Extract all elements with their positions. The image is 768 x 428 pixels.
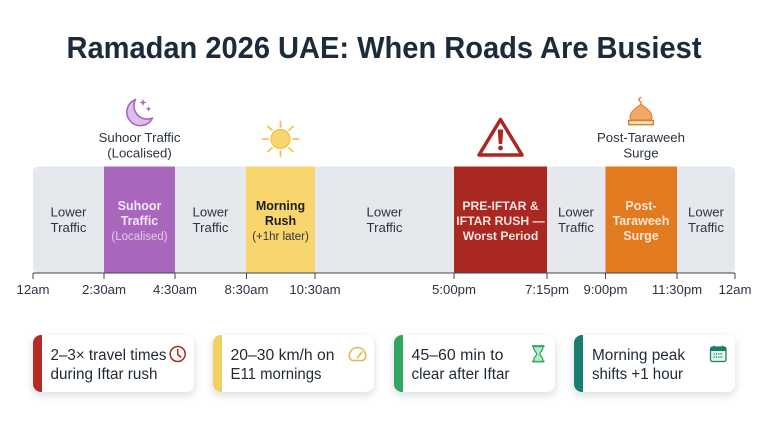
segment: morning rush: Rush [265, 214, 296, 228]
label: post-taraweeh surge: Surge [623, 146, 659, 160]
time axis: 9:00pm [584, 282, 628, 297]
icon: speedometer [349, 348, 366, 360]
segment: post-taraweeh surge: Surge [623, 229, 659, 243]
time axis: 4:30am [153, 282, 197, 297]
lower traffic labels: Lower [367, 204, 403, 220]
lower traffic labels: Lower [193, 204, 229, 220]
card: E11 speed: 20–30 km/h on [230, 347, 334, 364]
time axis: 8:30am [224, 282, 269, 297]
segment: iftar rush: IFTAR RUSH — [456, 214, 546, 228]
time axis: 12am [718, 282, 752, 297]
icon: hourglass [532, 346, 544, 362]
card: morning peak: Morning peak [592, 347, 685, 364]
card: travel times: during Iftar rush [50, 366, 158, 383]
card: travel times [33, 335, 194, 392]
lower traffic labels [51, 204, 725, 235]
lower traffic labels: Lower [51, 204, 87, 220]
segment: post-taraweeh surge: Taraweeh [613, 214, 669, 228]
lower traffic labels: Lower [558, 204, 595, 220]
card: morning peak: shifts +1 hour [592, 366, 683, 383]
lower traffic labels: Traffic [51, 220, 87, 235]
lower traffic labels: Lower [688, 204, 725, 220]
card: clearing time: clear after Iftar [412, 366, 510, 383]
time axis: 5:00pm [432, 282, 476, 297]
icon: crescent moon [127, 99, 152, 126]
card: morning peak [574, 335, 735, 392]
label: suhoor traffic: Suhoor Traffic [99, 130, 181, 145]
segment: post-taraweeh surge: Post- [625, 199, 657, 213]
lower traffic labels: Traffic [688, 220, 724, 235]
time axis: 7:15pm [525, 282, 569, 297]
time axis: 12am [16, 282, 50, 297]
icon: mosque dome [629, 98, 653, 125]
segment: suhoor traffic: (Localised) [111, 231, 168, 243]
segment: iftar rush [454, 166, 547, 273]
segment: suhoor traffic: Suhoor [118, 199, 162, 213]
lower traffic labels: Traffic [367, 220, 403, 235]
segment: iftar rush: PRE-IFTAR & [462, 199, 539, 213]
segment: morning rush [246, 166, 315, 273]
card: clearing time: 45–60 min to [412, 347, 504, 364]
card: clearing time [394, 335, 555, 392]
base band: lower traffic [33, 166, 735, 273]
icon: warning triangle [479, 120, 522, 155]
card: E11 speed: E11 mornings [230, 366, 322, 383]
label: post-taraweeh surge: Post-Taraweeh [597, 130, 685, 145]
card: travel times: 2–3× travel times [50, 347, 167, 364]
segment: morning rush: (+1hr later) [252, 231, 309, 243]
segment: morning rush: Morning [256, 199, 305, 213]
title: Ramadan 2026 UAE: When Roads Are Busiest [66, 31, 702, 65]
time axis: 10:30am [289, 282, 341, 297]
label: suhoor traffic: (Localised) [107, 146, 172, 160]
lower traffic labels: Traffic [193, 220, 229, 235]
segment: suhoor traffic [104, 166, 175, 273]
card: E11 speed [213, 335, 374, 392]
segment: suhoor traffic: Traffic [121, 214, 158, 228]
time axis: 2:30am [82, 282, 126, 297]
timeline band [33, 166, 735, 273]
icon: sun [262, 122, 298, 156]
lower traffic labels: Traffic [558, 220, 594, 235]
segment: post-taraweeh surge [606, 166, 677, 273]
icon: calendar [710, 346, 726, 362]
time axis: 11:30pm [652, 282, 702, 297]
time axis [16, 273, 752, 297]
segment: iftar rush: Worst Period [463, 229, 538, 243]
icon: clock [170, 346, 185, 362]
